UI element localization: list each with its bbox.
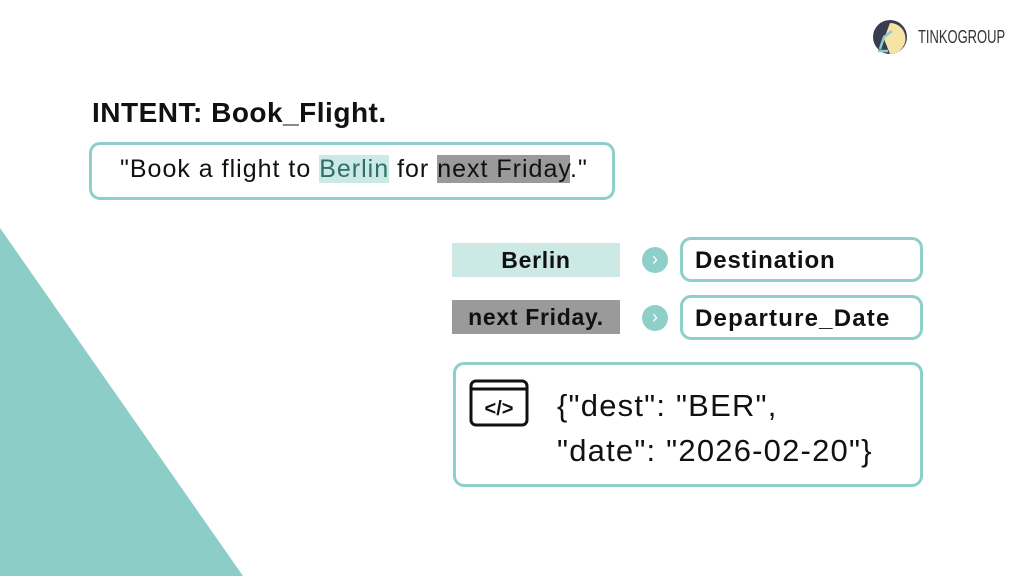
- icon: code: [470, 380, 528, 426]
- slot: Departure_Date: [680, 295, 923, 340]
- tag: next Friday: [452, 300, 620, 334]
- code box: [453, 362, 923, 487]
- logo: [873, 20, 1005, 54]
- logo: TINKOGROUP: [918, 27, 1005, 47]
- arrow 2: ›: [652, 307, 658, 327]
- title: INTENT: Book_Flight.: [92, 97, 387, 128]
- arrow 1: [642, 247, 668, 273]
- slot: Departure_Date: Departure_Date: [695, 305, 891, 332]
- JSON text: [557, 388, 873, 468]
- JSON text: {"dest": "BER",: [557, 388, 778, 423]
- icon: code: </>: [485, 398, 513, 420]
- quote box: "Book a flight to Berlin for next Friday.": [120, 155, 588, 183]
- tag: Berlin: [452, 243, 620, 277]
- tag: next Friday: next Friday.: [468, 304, 604, 330]
- slot: Destination: [680, 237, 923, 282]
- tag: Berlin: Berlin: [501, 247, 571, 273]
- arrow 2: [642, 305, 668, 331]
- slot: Destination: Destination: [695, 247, 836, 274]
- quote box: [89, 142, 615, 200]
- arrow 1: ›: [652, 249, 658, 269]
- JSON text: "date": "2026-02-20"}: [557, 433, 873, 468]
